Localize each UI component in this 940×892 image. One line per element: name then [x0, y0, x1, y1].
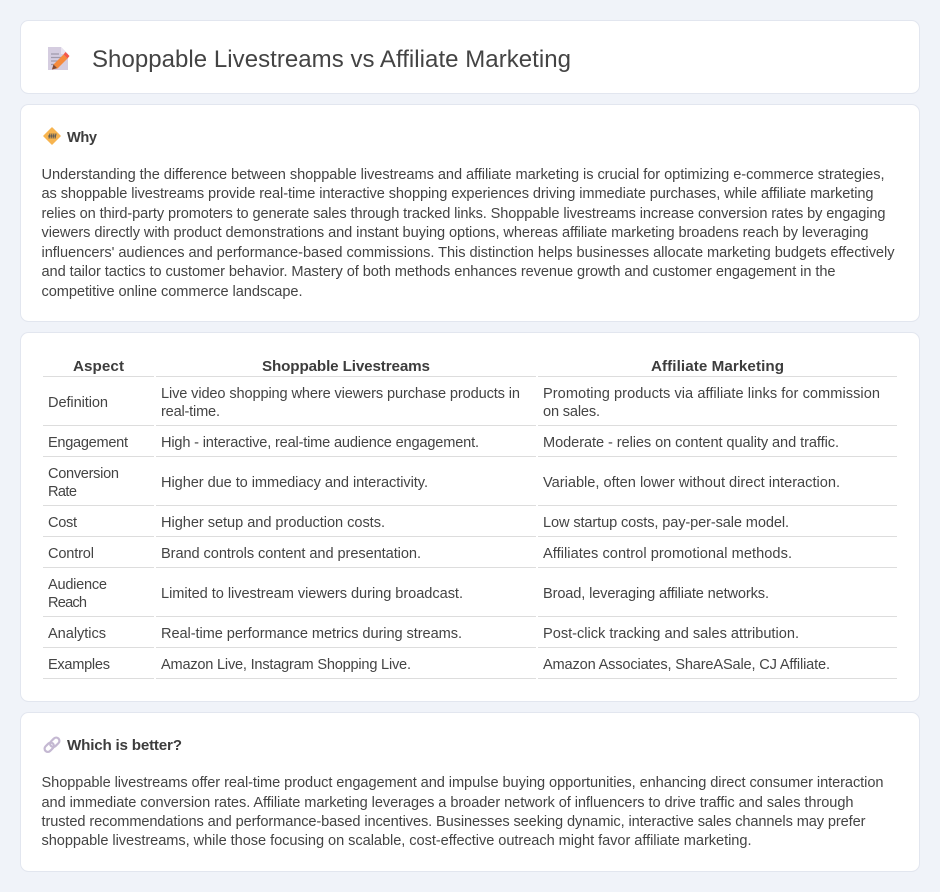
- heading: why: Why: [67, 130, 98, 146]
- text block: why paragraph: relies on third-party promoters to generate sales through tracked links. Shoppable livestreams increase conversion rates by engaging: [42, 206, 886, 222]
- row: examples: [48, 657, 830, 673]
- row: engagement: Engagement: [48, 435, 128, 451]
- row: conversion rate: Conversion: [48, 466, 119, 482]
- text block: which is better paragraph: [42, 775, 884, 849]
- row: definition: Promoting products via affiliate links for commission: [543, 386, 880, 402]
- panel: which is better: [20, 712, 920, 872]
- text block: why paragraph: competitive online commerce landscape.: [42, 284, 302, 300]
- row: cost: Higher setup and production costs.: [161, 515, 385, 531]
- row: definition: real-time.: [161, 404, 220, 420]
- row: control: Affiliates control promotional methods.: [543, 546, 792, 562]
- row: conversion rate: Rate: [48, 484, 77, 500]
- icon: chain link: [43, 736, 61, 753]
- table header row: Shoppable Livestreams: [262, 358, 430, 375]
- row: audience reach: Audience: [48, 577, 107, 593]
- row: conversion rate: Variable, often lower without direct interaction.: [543, 475, 840, 491]
- row: definition: Definition: [48, 395, 108, 411]
- text block: which is better paragraph: shoppable livestreams, while those focusing on scalable, cost-effective outreach might favor affiliate marketing.: [42, 833, 752, 849]
- text block: why paragraph: influencers' audiences and performance-based commissions. This distinction helps businesses allocate marketing budgets effectively: [42, 245, 895, 261]
- row: definition: on sales.: [543, 404, 600, 420]
- text block: why paragraph: Understanding the difference between shoppable livestreams and affiliate marketing is crucial for optimizing e-commerce strategies,: [42, 167, 884, 183]
- row: control: Control: [48, 546, 94, 562]
- row: definition: [48, 386, 880, 420]
- row: cost: Low startup costs, pay-per-sale model.: [543, 515, 789, 531]
- text block: which is better paragraph: and immediate conversion rates. Affiliate marketing leverages a broader network of influencers to drive traffic and sales through: [42, 795, 854, 811]
- text block: which is better paragraph: Shoppable livestreams offer real-time product engagement and impulse buying opportunities, enhancing direct consumer interaction: [42, 775, 884, 791]
- row: control: [48, 546, 792, 562]
- text block: which is better paragraph: trusted recommendations and performance-based incentives. Businesses seeking dynamic, interactive sales channels may prefer: [42, 814, 866, 830]
- row: analytics: [48, 626, 799, 642]
- row: cost: Cost: [48, 515, 77, 531]
- row: audience reach: Limited to livestream viewers during broadcast.: [161, 586, 463, 602]
- text block: why paragraph: [42, 167, 895, 300]
- row: examples: Amazon Live, Instagram Shopping Live.: [161, 657, 411, 673]
- panel: header: [20, 20, 920, 94]
- row: engagement: High - interactive, real-time audience engagement.: [161, 435, 479, 451]
- row: examples: Examples: [48, 657, 110, 673]
- row: analytics: Analytics: [48, 626, 106, 642]
- row: definition: Live video shopping where viewers purchase products in: [161, 386, 520, 402]
- row: analytics: Post-click tracking and sales attribution.: [543, 626, 799, 642]
- text block: why paragraph: and tailor tactics to customer behavior. Mastery of both methods enhances revenue growth and customer engagement in the: [42, 264, 836, 280]
- icon: document with pencil: [48, 47, 70, 70]
- table header row: Affiliate Marketing: [651, 358, 784, 375]
- text block: why paragraph: viewers directly with product demonstrations and instant buying options, whereas affiliate marketing broadens reach by leveraging: [42, 225, 868, 241]
- icon: warning diamond: [44, 128, 60, 144]
- row: cost: [48, 515, 789, 531]
- row: conversion rate: [48, 466, 840, 500]
- row: conversion rate: Higher due to immediacy and interactivity.: [161, 475, 428, 491]
- row: control: Brand controls content and presentation.: [161, 546, 421, 562]
- text block: why paragraph: as shoppable livestreams provide real-time interactive shopping experiences driving immediate purchases, while affiliate marketing: [42, 186, 874, 202]
- row: examples: Amazon Associates, ShareASale, CJ Affiliate.: [543, 657, 830, 673]
- panel: why: [20, 104, 920, 322]
- title: Shoppable Livestreams vs Affiliate Marketing: [92, 46, 571, 73]
- row: audience reach: Reach: [48, 595, 87, 611]
- table header row: Aspect: [73, 358, 124, 375]
- row: audience reach: [48, 577, 769, 611]
- row: engagement: Moderate - relies on content quality and traffic.: [543, 435, 839, 451]
- panel: comparison table: [20, 332, 920, 702]
- row: analytics: Real-time performance metrics during streams.: [161, 626, 462, 642]
- table header row: [73, 358, 784, 375]
- row: audience reach: Broad, leveraging affiliate networks.: [543, 586, 769, 602]
- row: engagement: [48, 435, 839, 451]
- heading: which is better: Which is better?: [67, 737, 182, 754]
